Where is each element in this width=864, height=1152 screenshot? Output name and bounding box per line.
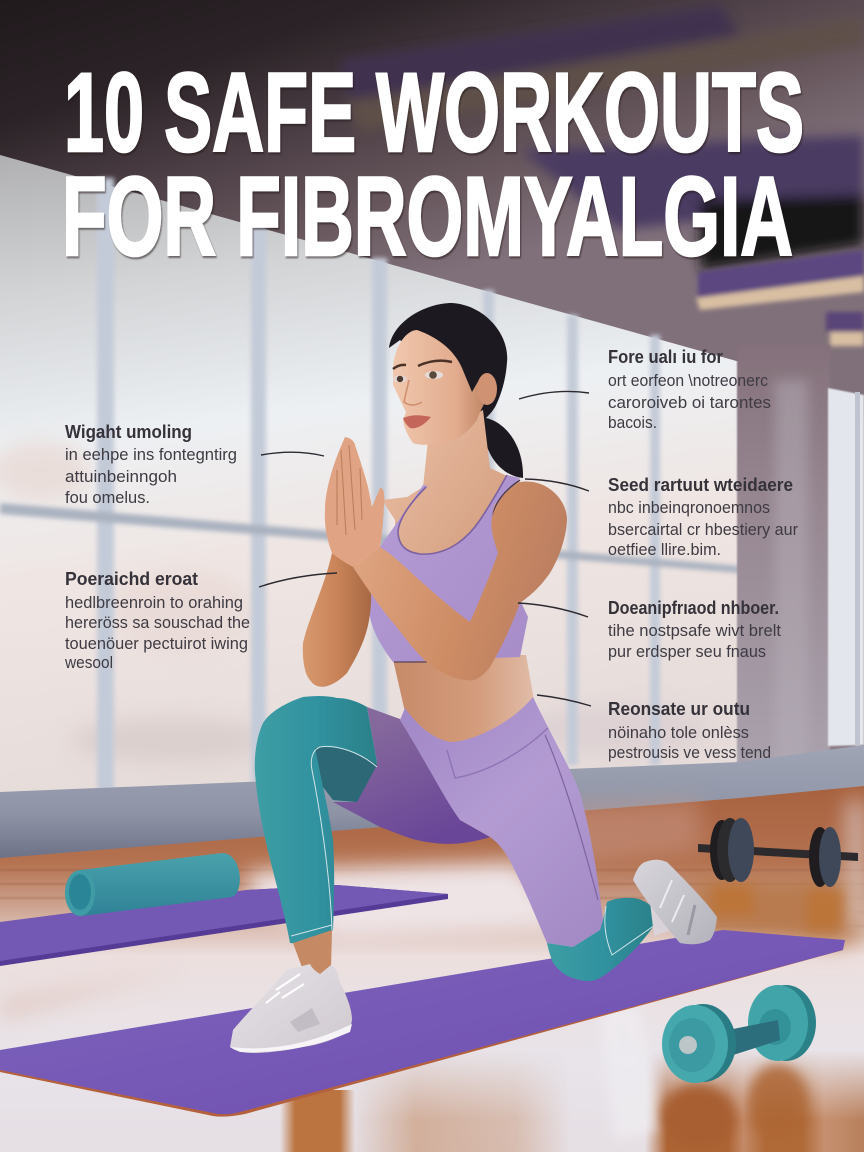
ceiling lights <box>696 250 864 346</box>
callout: right 3 <box>518 597 781 661</box>
rear calf teal <box>547 898 657 981</box>
callout: right 4: Reonsate ur outu <box>608 698 750 719</box>
black dumbbell <box>698 818 858 887</box>
callout: right 4 <box>537 695 771 762</box>
front ankle <box>293 930 332 976</box>
rear shoe <box>633 860 717 944</box>
front shoe <box>230 964 352 1053</box>
callout: right 3: tihe nostpsafe wivt brelt <box>608 621 781 640</box>
hair and ponytail <box>389 303 523 478</box>
floor reflections <box>0 800 864 1152</box>
front leg teal <box>255 696 377 943</box>
title <box>62 50 804 279</box>
leggings seam <box>291 746 377 936</box>
praying hands <box>325 437 384 567</box>
callout: right 2: bsercairtal cr hbestiery aur <box>608 520 798 539</box>
waistband seam <box>447 728 548 778</box>
windows <box>0 155 740 800</box>
callout: right 2: oetfiee llire.bim. <box>608 540 721 559</box>
callout: left 2: Poeraichd eroat <box>65 568 198 589</box>
face <box>393 330 497 445</box>
callout: right 2 <box>525 474 798 559</box>
distant trees <box>0 440 710 762</box>
callout: right 3: pur erdsper seu fnaus <box>608 642 766 661</box>
callout: right 4: pestrousis ve vess tend <box>608 743 771 762</box>
callout: left 2: wesool <box>64 653 113 672</box>
callout: right 1: bacois. <box>608 413 657 432</box>
sports bra <box>368 475 528 662</box>
callout: left 1: Wigaht umoling <box>65 421 192 442</box>
callout: right 1: ort eorfeon \notreonerc <box>608 371 768 390</box>
near arm <box>353 481 567 680</box>
teal dumbbell <box>662 985 816 1083</box>
foam roller <box>65 853 240 916</box>
window sill <box>0 745 864 860</box>
ear <box>477 373 497 405</box>
callout: left 1: fou omelus. <box>65 488 150 507</box>
leggings: hips and rear leg <box>400 697 603 947</box>
far arm <box>303 553 371 687</box>
callout: right 1: Fore ualı iu for <box>608 346 723 367</box>
callout: left 2: hereröss sa souschad the <box>65 613 250 632</box>
callout: left 1 <box>65 421 324 507</box>
back exercise mat <box>0 885 448 966</box>
callout: right 2: nbc inbeinqronoemnos <box>608 498 770 517</box>
woman in lunge pose <box>230 303 717 1053</box>
ceiling beams <box>340 5 864 270</box>
callout: right 1: caroroiveb oi tarontes <box>608 393 771 412</box>
main exercise mat <box>0 930 845 1117</box>
leggings: thigh shaded <box>333 707 490 844</box>
callout: right 1 <box>519 346 771 432</box>
midriff <box>392 655 534 745</box>
wall above windows <box>0 0 864 420</box>
right column <box>737 345 830 790</box>
callout: left 2: hedlbreenroin to orahing <box>65 593 243 612</box>
neck and chest <box>382 410 520 610</box>
callout: left 2 <box>64 568 337 672</box>
rear sock <box>650 902 672 936</box>
callout: left 2: touenöuer pectuirot iwing <box>65 634 248 653</box>
wood floor <box>0 786 864 1152</box>
callout: right 2: Seed rartuut wteidaere <box>608 474 793 495</box>
callout: left 1: attuinbeinngoh <box>65 467 177 486</box>
callout: right 4: nöinaho tole onlèss <box>608 723 749 742</box>
knee shadow panel <box>315 747 377 802</box>
callout: right 3: Doeanipfrıaod nhboer. <box>608 597 779 618</box>
callout: left 1: in eehpe ins fontegntirg <box>65 445 237 464</box>
